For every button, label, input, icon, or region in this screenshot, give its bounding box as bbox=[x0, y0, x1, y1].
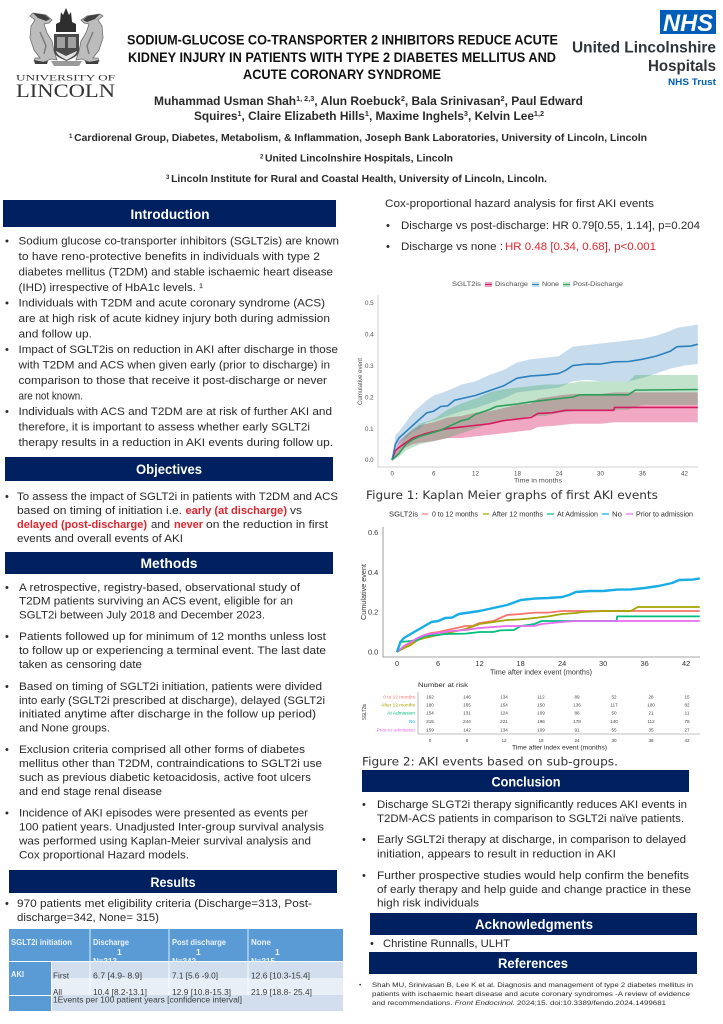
table: number at risk: 15 bbox=[684, 694, 690, 700]
table: AKI incidence by SGLT2i initiation: N=313 bbox=[93, 956, 117, 966]
text block: introduction bullets: • bbox=[5, 406, 9, 418]
table: AKI incidence by SGLT2i initiation bbox=[0, 929, 350, 1011]
text: acknowledged person: • bbox=[370, 938, 374, 950]
table: number at risk: 50 bbox=[611, 710, 617, 716]
panel: methods bbox=[5, 552, 333, 862]
panel: conclusion bbox=[362, 770, 691, 910]
legend: sub-groups: At Admission bbox=[557, 512, 598, 518]
axes and tick labels: 24 bbox=[556, 470, 563, 478]
table: AKI incidence by SGLT2i initiation: N=342 bbox=[172, 956, 196, 966]
title bbox=[127, 32, 558, 82]
authors: 2 bbox=[401, 96, 405, 103]
text block: objectives bullet: • bbox=[5, 491, 9, 503]
text block: reference citation: and recommendations. Front Endocrinol . 2024;15. doi:10.3389/fendo.2024.1499681 bbox=[372, 1000, 666, 1007]
table: number at risk: No bbox=[409, 719, 415, 725]
table: number at risk: 100 bbox=[647, 702, 655, 708]
table: number at risk: 18 bbox=[538, 738, 544, 743]
table: number at risk: 134 bbox=[500, 694, 508, 700]
panel: objectives bbox=[5, 457, 338, 545]
table: AKI incidence by SGLT2i initiation: 6.7 [4.9- 8.9] bbox=[93, 970, 142, 980]
table: number at risk: 134 bbox=[500, 728, 508, 732]
text block: methods bullets: Cox proportional Hazard models. bbox=[19, 850, 189, 862]
axes and tick labels: 0.2 bbox=[365, 394, 374, 402]
axes and tick labels: 0.4 bbox=[365, 332, 374, 338]
text block: eligibility bullet: discharge=342, None= 315) bbox=[17, 912, 159, 924]
text block: eligibility bullet: 970 patients met eligibility criteria (Discharge=313, Post- bbox=[17, 898, 312, 910]
text block: methods bullets: initiated anytime after discharge in the follow up period) bbox=[19, 708, 316, 720]
affiliations bbox=[69, 133, 647, 185]
text block: reference citation: Shah MU, Srinivasan B, Lee K et al. Diagnosis and management of type 2 diabetes mellitus in bbox=[372, 982, 693, 989]
legend: sub-groups: After 12 months bbox=[492, 512, 544, 518]
affiliations: 2 bbox=[260, 154, 265, 160]
table: AKI incidence by SGLT2i initiation: 1 bbox=[117, 947, 122, 957]
title: KIDNEY INJURY IN PATIENTS WITH TYPE 2 DIABETES MELLITUS AND bbox=[128, 50, 556, 65]
legend: sub-groups bbox=[389, 512, 693, 518]
text block: methods bullets bbox=[5, 582, 326, 862]
authors: 2 bbox=[501, 96, 505, 103]
text block: Cox proportional hazard analysis: Discharge vs post-discharge: HR 0.79[0.55, 1.14], p=0.204 bbox=[401, 220, 700, 232]
text block: objectives bullet: on the reduction in first bbox=[206, 519, 328, 531]
table: number at risk: 86 bbox=[574, 710, 580, 716]
text block: introduction bullets bbox=[5, 236, 339, 449]
legend: SGLT2is groups: Post-Discharge bbox=[573, 281, 624, 288]
table: number at risk: 21 bbox=[648, 710, 654, 716]
table: number at risk: 109 bbox=[537, 710, 545, 716]
text block: objectives bullet: based on timing of initiation i.e. bbox=[17, 505, 182, 517]
heading: Objectives: Objectives bbox=[136, 462, 202, 477]
text block: methods bullets: T2DM patients surviving an ACS event, eligible for an bbox=[19, 596, 293, 608]
text block: introduction bullets: comparison to those that receive it post-discharge or never bbox=[18, 375, 327, 387]
table: AKI incidence by SGLT2i initiation: 12.6 [10.3-15.4] bbox=[251, 970, 310, 980]
text block: introduction bullets: Impact of SGLT2is on reduction in AKI after discharge in those bbox=[18, 344, 338, 356]
text block: conclusion bullets bbox=[362, 799, 691, 910]
table: number at risk: 30 bbox=[611, 738, 617, 743]
table: number at risk: 136 bbox=[573, 702, 581, 708]
authors: , Claire Elizabeth Hills bbox=[242, 111, 365, 123]
table: number at risk: 109 bbox=[537, 728, 545, 732]
text block: introduction bullets: to have reno-protective benefits in individuals with type 2 bbox=[18, 251, 320, 263]
axes and tick labels: 42 bbox=[681, 470, 688, 478]
text: trust name: United Lincolnshire bbox=[572, 40, 716, 56]
text block: objectives bullet bbox=[5, 491, 338, 545]
curves: cumulative event bands and lines bbox=[392, 325, 698, 460]
heading: Results: Results bbox=[150, 875, 196, 890]
authors: 1 bbox=[365, 111, 369, 118]
text block: methods bullets: to follow up or experiencing a terminal event. The last date bbox=[19, 645, 326, 657]
heading: Acknowledgments: Acknowledgments bbox=[475, 917, 593, 932]
table: AKI incidence by SGLT2i initiation: AKI bbox=[11, 969, 24, 979]
axes and tick labels: Cumulative event bbox=[357, 358, 364, 405]
axes and tick labels: 0 bbox=[395, 659, 399, 668]
text block: Cox proportional hazard analysis: HR 0.48 [0.34, 0.68], p<0.001 bbox=[505, 241, 656, 253]
text block: conclusion bullets: high risk individuals bbox=[377, 898, 480, 910]
table: AKI incidence by SGLT2i initiation: SGLT2i initiation bbox=[11, 937, 72, 947]
text block: conclusion bullets: • bbox=[362, 799, 366, 811]
table: number at risk: 78 bbox=[684, 719, 690, 724]
table: number at risk: 117 bbox=[610, 702, 618, 708]
axes and tick labels: 0.1 bbox=[365, 426, 374, 433]
text block: objectives bullet: To assess the impact of SGLT2i in patients with T2DM and ACS bbox=[17, 491, 338, 503]
text block: Cox proportional hazard analysis: • bbox=[386, 241, 390, 253]
axes and tick labels: 0.0 bbox=[365, 457, 374, 464]
text block: introduction bullets: (IHD) irrespective of HbA1c levels. ¹ bbox=[18, 282, 203, 294]
table: number at risk: 35 bbox=[648, 728, 654, 732]
text block: methods bullets: taken as censoring date bbox=[19, 659, 142, 671]
heading: Conclusion bbox=[362, 770, 689, 792]
table: number at risk: 11 bbox=[685, 710, 690, 716]
affiliations: 3 bbox=[166, 175, 171, 181]
table: AKI incidence by SGLT2i initiation: 1 bbox=[196, 947, 201, 957]
authors: , Maxime Inghels bbox=[369, 111, 464, 123]
table: number at risk: 112 bbox=[537, 694, 545, 700]
text block: introduction bullets: Sodium glucose co-transporter inhibitors (SGLT2is) are known bbox=[18, 236, 339, 248]
legend: sub-groups: No bbox=[612, 512, 622, 518]
text block: methods bullets: Exclusion criteria comprised all other forms of diabetes bbox=[19, 744, 306, 756]
table: number at risk: After 12 months bbox=[381, 702, 416, 708]
axes and tick labels: 0.3 bbox=[365, 363, 374, 370]
axes and tick labels: 36 bbox=[640, 659, 649, 668]
text block: conclusion bullets: • bbox=[362, 870, 366, 882]
text block: introduction bullets: diabetes mellitus (T2DM) and stable ischaemic heart disease bbox=[18, 266, 333, 278]
text block: introduction bullets: • bbox=[5, 298, 9, 310]
table: number at risk: 0 to 12 months bbox=[383, 694, 416, 700]
table: number at risk: 52 bbox=[611, 694, 617, 700]
heading: Introduction: Introduction bbox=[130, 207, 210, 222]
affiliations: Cardiorenal Group, Diabetes, Metabolism, & Inflammation, Joseph Bank Laboratories, University of Lincoln, Lincoln bbox=[74, 133, 647, 144]
table: number at risk: 12 bbox=[501, 738, 507, 743]
table: number at risk: 82 bbox=[684, 702, 690, 708]
table: number at risk: 154 bbox=[500, 702, 508, 708]
heading: Acknowledgments bbox=[370, 913, 697, 935]
axes and tick labels: 18 bbox=[514, 470, 521, 478]
text block: eligibility bullet: • bbox=[5, 898, 9, 910]
text block: methods bullets: 100 patient years. Unadjusted Inter-group survival analysis bbox=[19, 822, 325, 834]
table: AKI incidence by SGLT2i initiation: N=315 bbox=[251, 956, 275, 966]
heading: Objectives bbox=[5, 457, 333, 481]
text block: objectives bullet: and bbox=[151, 519, 170, 531]
text block: Cox proportional hazard analysis bbox=[385, 198, 700, 253]
table: number at risk: Prior to admission bbox=[377, 728, 415, 734]
table: number at risk: 154 bbox=[426, 710, 434, 716]
text block: Cox proportional hazard analysis: • bbox=[386, 220, 390, 232]
table: AKI incidence by SGLT2i initiation: 1 bbox=[275, 947, 280, 957]
authors: 3 bbox=[464, 111, 468, 118]
text block: conclusion bullets: Further prospective studies would help confirm the benefits bbox=[377, 870, 690, 882]
text block: methods bullets: • bbox=[5, 631, 9, 643]
table: number at risk: 89 bbox=[574, 694, 580, 700]
table: AKI incidence by SGLT2i initiation: Post discharge bbox=[172, 937, 226, 947]
axes and tick labels: 6 bbox=[436, 659, 440, 668]
axes and tick labels: Time in months bbox=[514, 478, 562, 484]
affiliations: 1 bbox=[69, 134, 74, 140]
heading: References bbox=[369, 952, 697, 974]
axes and tick labels: 6 bbox=[432, 470, 436, 478]
panel: results bbox=[0, 870, 350, 1011]
axes and tick labels: Time after index event (months) bbox=[490, 668, 592, 676]
authors: 1 bbox=[238, 111, 242, 118]
text block: methods bullets: was performed using Kaplan-Meier survival analysis and bbox=[18, 836, 311, 848]
table: number at risk: 178 bbox=[573, 719, 581, 724]
table: AKI incidence by SGLT2i initiation: None bbox=[251, 937, 271, 947]
text block: conclusion bullets: T2DM-ACS patients in comparison to SGLT2i naïve patients. bbox=[377, 813, 684, 825]
heading: References: References bbox=[498, 956, 568, 971]
table: number at risk: 124 bbox=[500, 710, 508, 716]
table: number at risk: 28 bbox=[648, 694, 654, 700]
panel: acknowledgments bbox=[370, 913, 697, 950]
text block: reference citation: • bbox=[359, 982, 362, 989]
heading: Introduction bbox=[3, 200, 336, 227]
text block: Cox proportional hazard analysis: Discharge vs none : bbox=[401, 241, 503, 253]
heading: Conclusion: Conclusion bbox=[492, 774, 560, 790]
heading: Results bbox=[9, 870, 337, 893]
title: ACUTE CORONARY SYNDROME bbox=[243, 67, 441, 82]
chart: AKI events by sub-group bbox=[359, 512, 700, 752]
table: number at risk: 221 bbox=[500, 719, 508, 724]
text block: methods bullets: • bbox=[5, 744, 9, 756]
table: number at risk: SGLT2is bbox=[362, 704, 368, 720]
table: number at risk: 55 bbox=[611, 728, 617, 732]
text block: reference citation: patients with ischaemic heart disease and acute coronary syndromes -A review of evidence bbox=[372, 991, 690, 998]
axes and tick labels: 24 bbox=[558, 659, 566, 668]
table: number at risk: 0 bbox=[429, 738, 432, 743]
text block: introduction bullets: Individuals with T2DM and acute coronary syndrome (ACS) bbox=[18, 298, 325, 310]
caption: figure 1: Figure 1: Kaplan Meier graphs of first AKI events bbox=[366, 488, 658, 502]
text block: objectives bullet: events and overall events of AKI bbox=[17, 533, 183, 545]
logo: NHS United Lincolnshire Hospitals bbox=[572, 10, 716, 87]
text: trust name: Hospitals bbox=[648, 58, 716, 75]
legend: SGLT2is groups: SGLT2is bbox=[452, 281, 481, 288]
axes and tick labels: 0.2 bbox=[368, 608, 378, 616]
table: number at risk: 180 bbox=[426, 702, 434, 708]
curves: sub-group lines bbox=[397, 578, 700, 652]
table: number at risk: 42 bbox=[684, 738, 690, 743]
axes and tick labels bbox=[357, 295, 698, 484]
legend: SGLT2is groups bbox=[452, 281, 624, 288]
axes and tick labels: 0.0 bbox=[368, 648, 378, 656]
title: SODIUM-GLUCOSE CO-TRANSPORTER 2 INHIBITORS REDUCE ACUTE bbox=[127, 32, 558, 48]
authors bbox=[154, 96, 583, 123]
axes and tick labels: Cumulative event bbox=[359, 564, 368, 620]
text block: methods bullets: and None groups. bbox=[19, 722, 110, 734]
text: Lincoln: LINCOLN bbox=[16, 81, 115, 102]
panel: introduction bbox=[3, 200, 339, 449]
authors: , Alun Roebuck bbox=[314, 96, 401, 108]
table: AKI incidence by SGLT2i initiation: All bbox=[53, 987, 62, 997]
caption: figure 2: Figure 2: AKI events based on sub-groups. bbox=[362, 754, 618, 768]
table: number at risk: 91 bbox=[574, 728, 580, 732]
text: University of: UNIVERSITY OF bbox=[16, 72, 115, 82]
text block: conclusion bullets: initiation, appears to result in reduction in AKI bbox=[377, 848, 616, 860]
table: number at risk: Number at risk bbox=[418, 682, 469, 689]
table: number at risk: 162 bbox=[426, 694, 434, 700]
text block: conclusion bullets: Discharge SLGT2i therapy significantly reduces AKI events in bbox=[377, 799, 687, 811]
affiliations: United Lincolnshire Hospitals, Lincoln bbox=[265, 154, 453, 164]
text block: introduction bullets: • bbox=[5, 236, 9, 248]
panel: references bbox=[359, 952, 697, 1007]
text: trust name: NHS Trust bbox=[668, 77, 716, 87]
legend: SGLT2is groups: None bbox=[542, 281, 560, 288]
authors: Muhammad Usman Shah bbox=[154, 96, 291, 108]
axes and tick labels: 36 bbox=[639, 470, 646, 478]
table: number at risk: 6 bbox=[466, 738, 469, 743]
text block: methods bullets: such as previous diabetic ketoacidosis, active foot ulcers bbox=[19, 772, 312, 784]
text block: methods bullets: • bbox=[5, 808, 9, 820]
table: AKI incidence by SGLT2i initiation: 10.4 [8.2-13.1] bbox=[93, 987, 147, 997]
axes and tick labels bbox=[359, 527, 700, 676]
text block: methods bullets: Patients followed up for minimum of 12 months unless lost bbox=[19, 631, 326, 643]
icon: university crest bbox=[30, 8, 103, 66]
text block: methods bullets: A retrospective, registry-based, observational study of bbox=[19, 582, 301, 594]
table: number at risk: 315 bbox=[426, 719, 434, 724]
text block: methods bullets: Incidence of AKI episodes were presented as events per bbox=[19, 808, 308, 820]
text: trust name bbox=[572, 40, 716, 87]
affiliations: Lincoln Institute for Rural and Coastal Health, University of Lincoln, Lincoln. bbox=[171, 174, 547, 185]
text: acknowledged person: Christine Runnalls, ULHT bbox=[383, 938, 510, 950]
axes and tick labels: 0 bbox=[390, 470, 394, 478]
logo: University of Lincoln bbox=[16, 8, 115, 102]
text block: objectives bullet: delayed (post-discharge) bbox=[17, 519, 147, 531]
text block: introduction bullets: Individuals with ACS and T2DM are at risk of further AKI and bbox=[18, 406, 332, 418]
axes and tick labels: 42 bbox=[682, 659, 690, 668]
table: number at risk: 131 bbox=[463, 710, 471, 716]
table: number at risk: 146 bbox=[463, 694, 471, 700]
table: AKI incidence by SGLT2i initiation: Discharge bbox=[93, 937, 129, 947]
text block: conclusion bullets: • bbox=[362, 834, 366, 846]
text block: introduction bullets: with T2DM and ACS when given early (prior to discharge) in bbox=[17, 360, 330, 372]
text block: methods bullets: into early (SGLT2i prescribed at discharge), delayed (SGLT2i bbox=[19, 695, 325, 707]
table: AKI incidence by SGLT2i initiation: First bbox=[53, 970, 70, 980]
chart: Kaplan Meier first AKI events bbox=[357, 281, 698, 484]
authors: Squires bbox=[194, 111, 236, 123]
table: number at risk: 159 bbox=[426, 728, 434, 732]
authors: , Kelvin Lee bbox=[468, 111, 534, 123]
table: number at risk: 140 bbox=[610, 719, 618, 724]
text block: introduction bullets: are not known. bbox=[18, 390, 83, 402]
text block: introduction bullets: therefore, it is important to assess whether early SGLT2i bbox=[18, 422, 310, 434]
table: number at risk: 112 bbox=[647, 719, 655, 724]
legend: SGLT2is groups: Discharge bbox=[495, 281, 529, 288]
table: AKI incidence by SGLT2i initiation: 7.1 [5.6 -9.0] bbox=[172, 970, 218, 980]
table: number at risk: 36 bbox=[648, 738, 654, 743]
axes and tick labels: 0.4 bbox=[368, 568, 378, 577]
authors: 1,2 bbox=[534, 111, 544, 118]
text block: objectives bullet: never bbox=[174, 519, 204, 531]
heading: Methods bbox=[5, 552, 333, 574]
icon: NHS lozenge: NHS bbox=[663, 10, 713, 37]
text block: methods bullets: SGLT2i between July 2018 and December 2023. bbox=[19, 610, 265, 622]
table: number at risk: 244 bbox=[463, 719, 471, 724]
authors: 1, 2,3 bbox=[296, 96, 314, 103]
text block: Cox proportional hazard analysis: Cox-proportional hazard analysis for first AKI events bbox=[385, 198, 654, 210]
legend: sub-groups: SGLT2is bbox=[389, 512, 419, 518]
table: number at risk: 150 bbox=[537, 702, 545, 708]
table: AKI incidence by SGLT2i initiation: 21.9 [18.8- 25.4] bbox=[251, 987, 312, 997]
authors: , Paul Edward bbox=[505, 96, 583, 108]
text block: methods bullets: • bbox=[5, 681, 9, 693]
text block: introduction bullets: are at high risk of acute kidney injury both during admission bbox=[18, 313, 330, 325]
table: number at risk: 165 bbox=[463, 702, 471, 708]
text block: objectives bullet: early (at discharge) bbox=[186, 505, 287, 517]
text block: methods bullets: and end stage renal disease bbox=[19, 786, 162, 798]
axes and tick labels: 30 bbox=[597, 470, 604, 478]
legend: sub-groups: 0 to 12 months bbox=[432, 512, 478, 518]
table: number at risk bbox=[362, 682, 700, 752]
axes and tick labels: 0.5 bbox=[365, 300, 374, 307]
text block: methods bullets: Based on timing of SGLT2i initiation, patients were divided bbox=[19, 681, 322, 693]
text block: eligibility bullet bbox=[5, 898, 312, 924]
axes and tick labels: 12 bbox=[472, 470, 479, 478]
text block: methods bullets: mellitus other than T2DM, contraindications to SGLT2i use bbox=[19, 758, 322, 770]
text block: introduction bullets: therapy results in a reduction in AKI events during follow up. bbox=[18, 437, 333, 449]
legend: sub-groups: Prior to admission bbox=[636, 512, 693, 518]
text block: objectives bullet: vs bbox=[290, 505, 303, 517]
text block: introduction bullets: and follow up. bbox=[18, 328, 92, 340]
text block: methods bullets: • bbox=[5, 582, 9, 594]
text block: conclusion bullets: of early therapy and help guide and change practice in these bbox=[377, 884, 691, 896]
table: number at risk: 27 bbox=[684, 728, 690, 732]
table: AKI incidence by SGLT2i initiation: 1Events per 100 patient years [confidence interval] bbox=[53, 994, 242, 1004]
table: number at risk: 24 bbox=[574, 738, 580, 743]
table: number at risk: 142 bbox=[463, 728, 471, 732]
axes and tick labels: 0.6 bbox=[368, 528, 378, 537]
heading: Methods: Methods bbox=[140, 556, 198, 571]
text block: conclusion bullets: Early SGLT2i therapy at discharge, in comparison to delayed bbox=[377, 834, 686, 846]
axes and tick labels: 18 bbox=[516, 659, 525, 668]
axes and tick labels: 30 bbox=[599, 659, 607, 668]
table: AKI incidence by SGLT2i initiation: 12.9 [10.8-15.3] bbox=[172, 987, 231, 997]
authors: , Bala Srinivasan bbox=[405, 96, 501, 108]
text block: reference citation bbox=[359, 982, 693, 1007]
table: number at risk: Time after index event (months) bbox=[512, 746, 607, 752]
table: number at risk: At Admission bbox=[387, 710, 415, 716]
table: number at risk: 196 bbox=[537, 719, 545, 724]
text block: introduction bullets: • bbox=[5, 344, 9, 356]
axes and tick labels: 12 bbox=[476, 659, 484, 668]
